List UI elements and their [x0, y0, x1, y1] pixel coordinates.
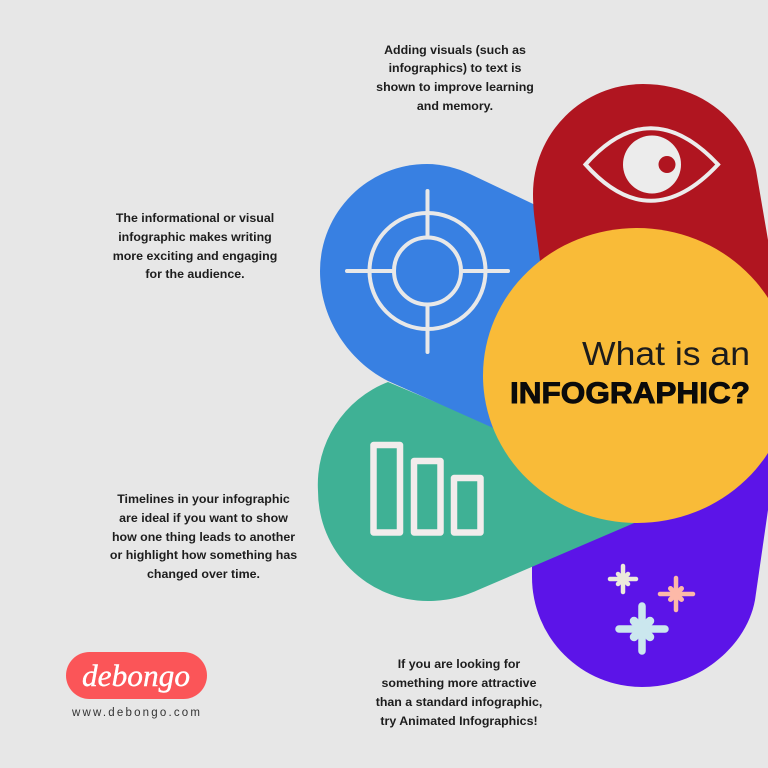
petal: green [318, 382, 660, 601]
text block: animated infographics: If you are looking for [398, 657, 520, 671]
text block: engaging: infographic makes writing [118, 230, 272, 244]
title: What is an [582, 335, 750, 372]
logo: debongo [66, 652, 207, 699]
text block: learning and memory [376, 43, 534, 113]
text block: timelines: are ideal if you want to show [119, 511, 288, 525]
website url: www.debongo.com [71, 707, 200, 719]
petal: purple [532, 420, 768, 687]
text block: animated infographics [376, 657, 542, 728]
text block: learning and memory: infographics) to text is [389, 61, 522, 75]
petal: blue [320, 164, 560, 431]
text block: timelines: or highlight how something has [110, 548, 297, 562]
text block: animated infographics: something more attractive [382, 676, 537, 690]
text block: engaging: for the audience. [145, 267, 245, 281]
center circle [483, 228, 768, 523]
text block: timelines: how one thing leads to another [112, 530, 295, 544]
text block: engaging: more exciting and engaging [113, 249, 277, 263]
text block: engaging [113, 211, 277, 281]
text block: timelines: changed over time. [147, 567, 260, 581]
icon: bar chart [374, 445, 480, 532]
title [510, 335, 750, 410]
text block: animated infographics: try Animated Infographics! [380, 714, 538, 728]
icon: target crosshair [347, 191, 508, 352]
icon: eye [586, 128, 718, 201]
text block: timelines [110, 492, 297, 581]
petal: red [533, 84, 768, 340]
text block: learning and memory: shown to improve learning [376, 80, 534, 94]
title: INFOGRAPHIC? [510, 377, 750, 410]
text block: animated infographics: than a standard infographic, [376, 695, 542, 709]
text block: learning and memory: and memory. [417, 99, 493, 113]
sparkle: light blue [619, 606, 665, 651]
logo: debongo: debongo [82, 658, 190, 693]
text block: timelines: Timelines in your infographic [117, 492, 290, 506]
text block: learning and memory: Adding visuals (such as [384, 43, 526, 57]
icon: sparkles [610, 566, 693, 651]
sparkle: pink [660, 578, 693, 610]
sparkle: cream [610, 566, 636, 592]
text block: engaging: The informational or visual [116, 211, 274, 225]
